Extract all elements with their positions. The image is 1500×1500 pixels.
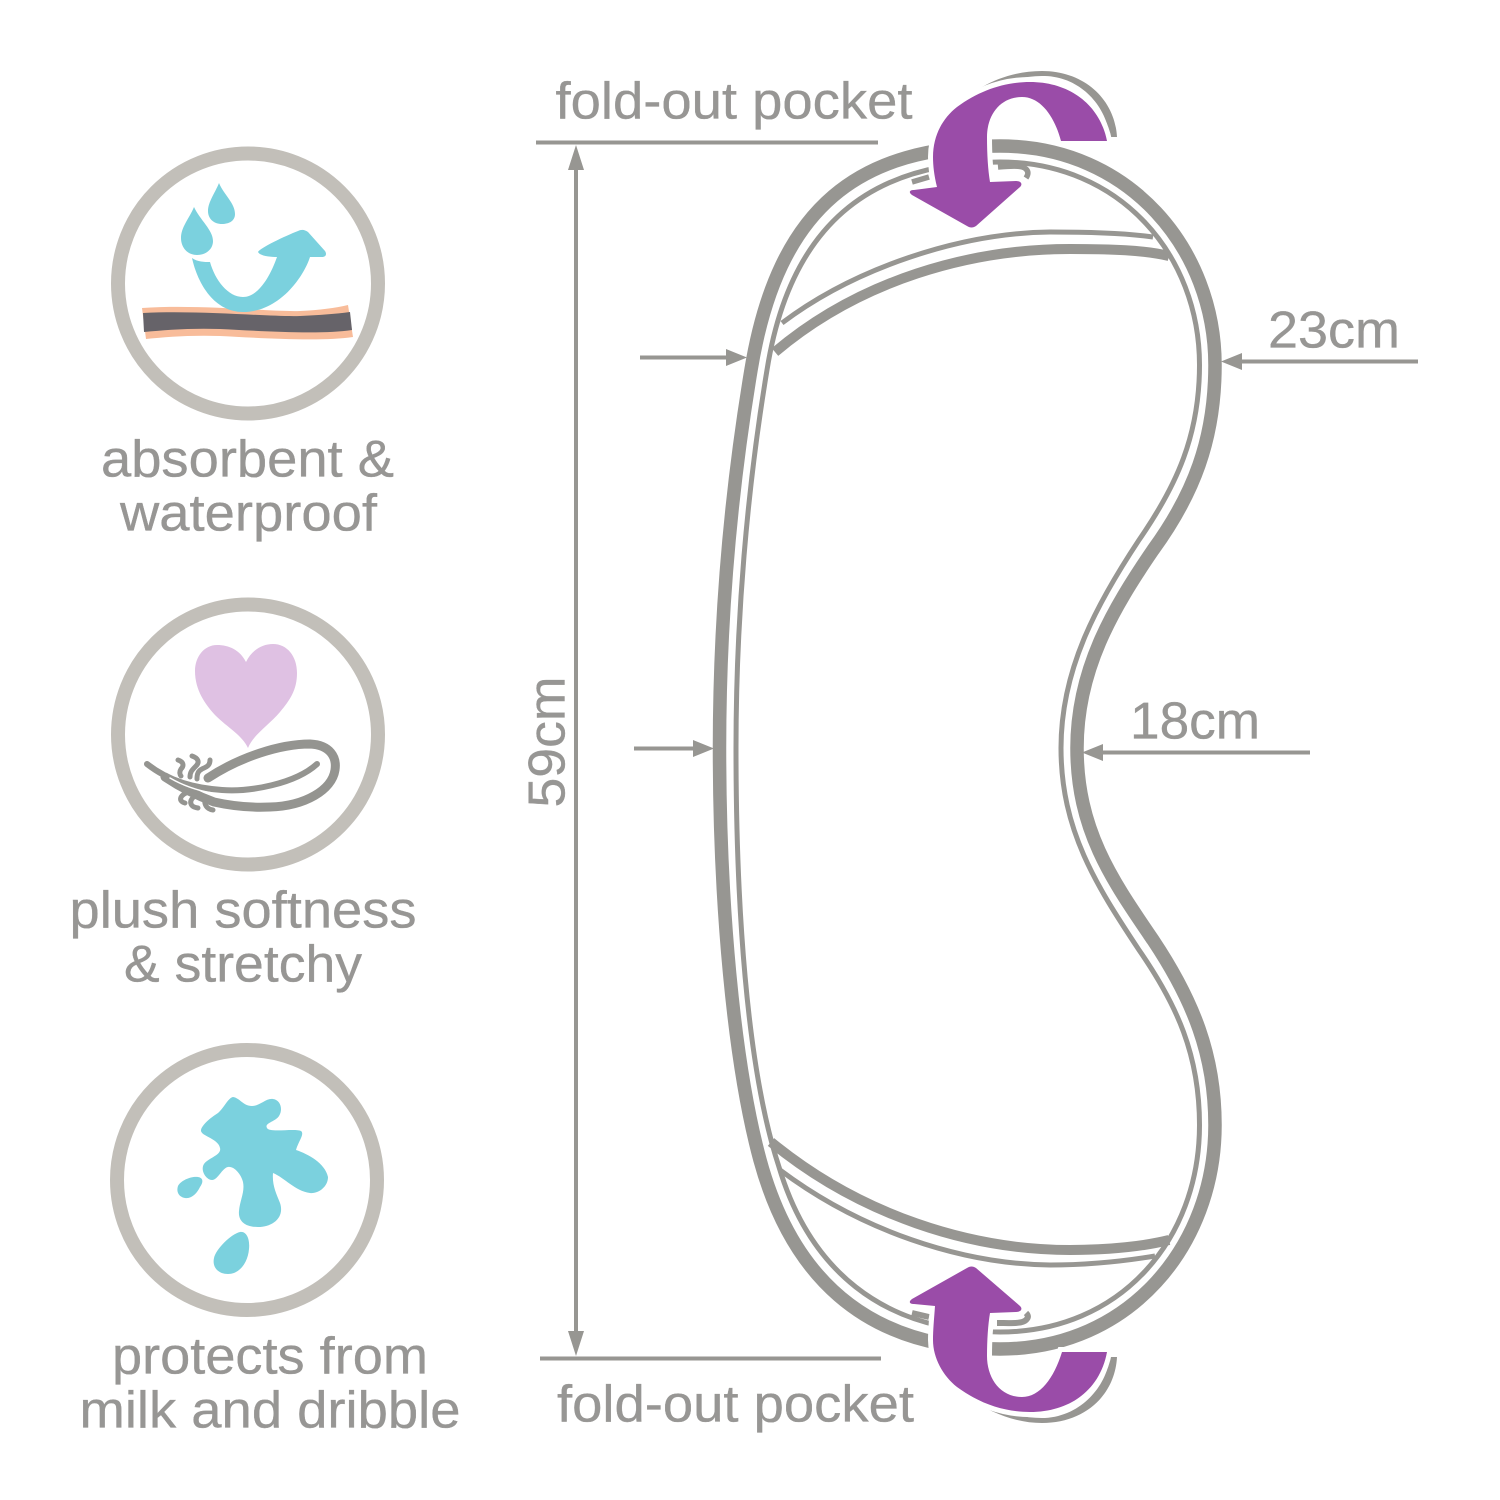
pocket edge fragments	[912, 1313, 1028, 1323]
label: protects from milk and dribble: protects from	[112, 1328, 428, 1386]
dimension: 23cm width	[640, 302, 1418, 370]
label: protects from milk and dribble: milk and dribble	[80, 1382, 460, 1440]
label: fold-out pocket top: fold-out pocket	[556, 72, 913, 130]
icon: feather	[147, 744, 335, 810]
pocket edge fragments	[912, 166, 1028, 182]
icon: bounce arrow	[192, 230, 326, 312]
dimension: 18cm width	[634, 692, 1310, 761]
icon: heart	[195, 644, 297, 748]
pillow outer outline	[720, 146, 1215, 1349]
label: fold-out pocket bottom: fold-out pocket	[557, 1376, 915, 1434]
arrow shadow arc	[958, 1357, 1117, 1423]
icon: water drops	[181, 183, 235, 255]
icon ring	[117, 1050, 377, 1310]
icon: fabric layers	[142, 305, 353, 339]
panel: protects from milk and dribble	[80, 1050, 460, 1440]
panel: plush softness and stretchy	[70, 604, 416, 994]
dimension: 59cm height: 59cm	[518, 676, 576, 808]
pillow inner outline	[736, 162, 1200, 1332]
dimension: 18cm width: 18cm	[1130, 692, 1260, 750]
dimension: 59cm height	[518, 142, 881, 1358]
label: absorbent and waterproof	[101, 430, 394, 542]
label: absorbent and waterproof: absorbent &	[101, 430, 394, 488]
dimension: 23cm width: 23cm	[1268, 302, 1400, 360]
bottom pocket seam	[771, 1142, 1169, 1265]
arrow: bottom fold-out	[910, 1266, 1117, 1423]
label: plush softness and stretchy: & stretchy	[124, 936, 362, 994]
icon: splash	[177, 1097, 328, 1274]
arrow shadow arc	[957, 71, 1117, 137]
icon ring	[118, 604, 378, 864]
top pocket seam	[775, 232, 1169, 352]
arrow: top fold-out	[910, 71, 1117, 228]
label: absorbent and waterproof: waterproof	[119, 484, 378, 542]
label: plush softness and stretchy	[70, 882, 416, 994]
purple fold arrow	[910, 82, 1107, 228]
icon ring	[118, 154, 378, 414]
label: plush softness and stretchy: plush softness	[70, 882, 416, 940]
purple fold arrow	[910, 1266, 1107, 1412]
panel: product diagram	[518, 71, 1418, 1434]
label: protects from milk and dribble	[80, 1328, 460, 1440]
panel: absorbent and waterproof	[101, 154, 394, 542]
